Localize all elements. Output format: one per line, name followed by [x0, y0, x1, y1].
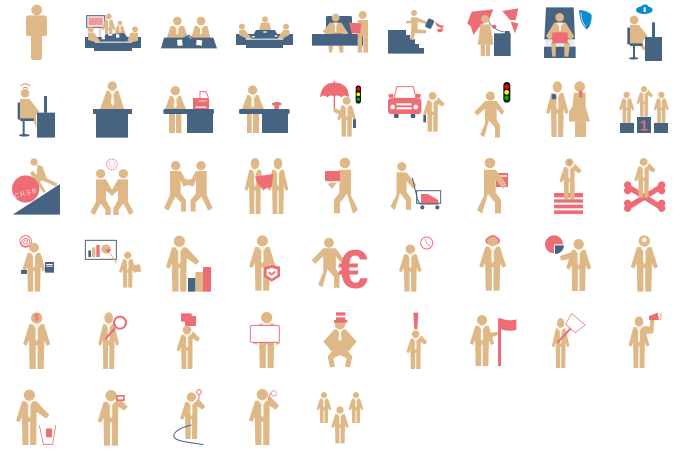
icon: man at desk with phone	[239, 85, 290, 133]
icon: man pushing ball up slope	[12, 158, 60, 215]
icon: man walking with euro sign: €	[338, 238, 369, 300]
icon: man holding blank sign	[250, 312, 280, 368]
icon: group of three small men	[317, 392, 363, 443]
icon: boardroom meeting with chart	[85, 14, 141, 51]
icon: three men on winners podium: 1	[640, 119, 648, 135]
icon: man with phone call symbol	[249, 389, 279, 445]
icon: man at computer with signal	[18, 84, 55, 138]
icon: man with camera	[98, 390, 128, 446]
icon: man with map pin and route	[174, 390, 205, 445]
icon: man with email and files: @	[21, 237, 31, 248]
icon: man with clock	[399, 237, 433, 292]
icon: business couple	[546, 81, 590, 137]
icon: man with dollar head: $	[34, 313, 39, 323]
icon: man with speech bubbles	[177, 313, 200, 369]
icon: man presenting chart board	[85, 240, 141, 288]
icon: standing man	[26, 5, 47, 60]
icon: car and man on phone	[388, 87, 445, 132]
icon: man pushing ball up slope: CRSB	[14, 187, 39, 200]
icon: man climbing stairs with bag	[388, 10, 444, 54]
icon: man on stack of stripes: ?	[567, 160, 571, 167]
icon: man with email and files	[20, 236, 54, 292]
icon: man with bar chart	[166, 236, 211, 292]
icon: two men and globe	[90, 159, 134, 215]
icon: man with magnifying glass	[98, 312, 126, 369]
icon: man at desk with reader	[312, 11, 368, 53]
icon: man carrying red folder	[325, 158, 358, 214]
icon: man with shield	[249, 235, 280, 291]
icon: man pushing shopping cart	[391, 162, 441, 210]
icon: three men on winners podium	[619, 86, 669, 135]
icon: man on chair with laptop and shield	[544, 7, 592, 58]
icon: man with dollar head	[23, 312, 50, 369]
icon: man walking with traffic light	[474, 82, 510, 138]
icon: man with exclamation mark	[406, 313, 427, 369]
icon: man with headset	[479, 235, 506, 291]
icon: two men shaking hands	[164, 161, 213, 212]
icon: man at podium	[93, 81, 132, 138]
icon: man holding placard	[552, 313, 585, 368]
icon: man walking with euro sign	[312, 238, 369, 300]
icon: two people at table	[161, 17, 217, 48]
icon: man with umbrella and traffic light	[320, 81, 361, 137]
icon: man with pie chart	[545, 235, 591, 291]
icon: man holding red flag	[470, 315, 516, 366]
icon: man with megaphone	[629, 313, 661, 368]
icon: man on stack of stripes	[554, 158, 583, 214]
icon: man at desk with printer	[163, 86, 214, 133]
icon: man on crossed bones	[624, 158, 665, 212]
icon: man throwing into bin	[16, 390, 56, 445]
icon: dancing man in red hat	[323, 312, 357, 368]
icon: two men with map	[245, 158, 288, 214]
icon: man carrying box	[477, 158, 508, 214]
icon: woman with world map and bin	[467, 8, 518, 56]
icon: man with light bulb head	[631, 235, 658, 292]
icon: three people at table	[236, 16, 293, 48]
icon: man at computer with blue cloud	[627, 4, 662, 61]
